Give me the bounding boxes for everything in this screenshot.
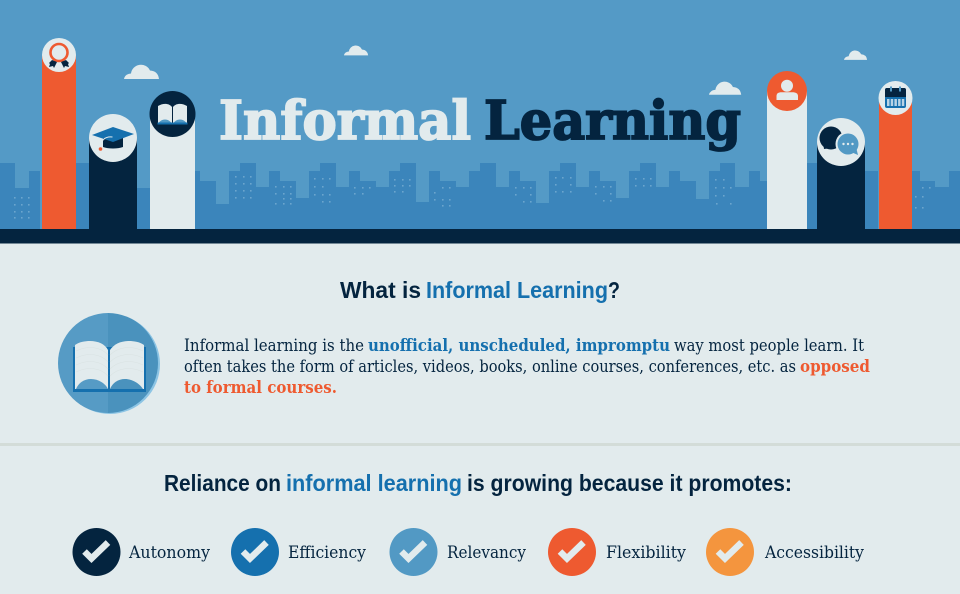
benefit: flexibility <box>548 528 687 576</box>
definition text: Informal learning is the <box>184 336 364 355</box>
bar: white with book <box>150 91 196 229</box>
panel: header banner <box>0 0 960 244</box>
heading: reliance on informal learning <box>164 470 792 496</box>
definition text: to formal courses. <box>184 378 337 397</box>
definition text: unofficial, unscheduled, impromptu <box>368 336 670 355</box>
bar: orange with ribbon <box>42 38 76 229</box>
title: Informal <box>219 90 471 152</box>
city skyline <box>0 163 960 229</box>
panel: definition <box>58 277 870 414</box>
ground strip <box>0 229 960 244</box>
bar: orange with calendar <box>878 81 912 229</box>
benefit: flexibility: Flexibility <box>606 543 687 562</box>
heading: reliance on informal learning: Reliance on <box>164 470 281 496</box>
benefit: efficiency: Efficiency <box>288 543 367 562</box>
definition text: opposed <box>800 357 870 376</box>
benefit: relevancy: Relevancy <box>447 543 527 562</box>
definition text: often takes the form of articles, videos, books, online courses, conferences, etc. as <box>184 357 796 376</box>
cloud 4 <box>844 50 867 60</box>
bar: navy with graduation cap <box>89 114 137 229</box>
cloud 2 <box>344 45 368 55</box>
icon: open book <box>58 313 160 414</box>
benefit: accessibility <box>706 528 865 576</box>
cloud 3 <box>709 82 741 95</box>
heading: what is informal learning: Informal Learning <box>426 277 608 303</box>
definition text: way most people learn. It <box>674 336 864 355</box>
benefit: relevancy <box>390 528 527 576</box>
benefit: efficiency <box>231 528 367 576</box>
benefit: autonomy: Autonomy <box>128 543 211 562</box>
bar: navy with speech bubbles <box>817 118 865 229</box>
benefit: accessibility: Accessibility <box>764 543 865 562</box>
heading: what is informal learning: ? <box>608 277 620 303</box>
cloud 1 <box>124 65 159 79</box>
bar: white with person <box>767 71 807 229</box>
panel: benefits <box>72 470 865 576</box>
title: Learning <box>484 90 741 152</box>
heading: what is informal learning: What is <box>340 277 421 303</box>
definition text <box>184 336 870 397</box>
title <box>219 90 741 152</box>
heading: what is informal learning <box>340 277 620 303</box>
heading: reliance on informal learning: informal learning <box>286 470 462 496</box>
skyline windows <box>14 176 931 219</box>
heading: reliance on informal learning: is growing because it promotes: <box>467 470 792 496</box>
benefit: autonomy <box>72 528 211 576</box>
